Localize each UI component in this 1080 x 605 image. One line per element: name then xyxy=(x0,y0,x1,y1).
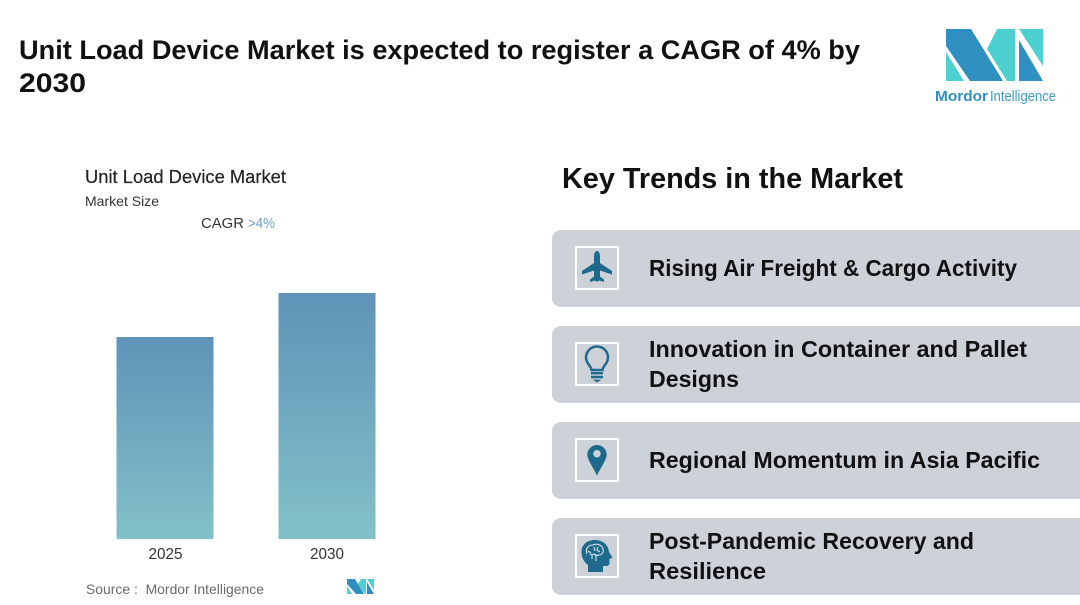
title xyxy=(19,35,860,98)
trend text xyxy=(649,336,1027,392)
axis label: 2025: 2025 xyxy=(148,546,182,563)
panel: Post-Pandemic Recovery xyxy=(552,518,1080,595)
section heading: Key Trends in the Market xyxy=(562,163,903,195)
CAGR label: CAGR xyxy=(201,215,244,232)
title: Unit Load Device Market is expected to register a CAGR of 4% by xyxy=(19,35,860,65)
trend text: Rising Air Freight & Cargo Activity xyxy=(649,255,1017,281)
panel: Regional Momentum xyxy=(552,422,1080,499)
icon: airplane xyxy=(576,247,618,289)
icon: head with brain xyxy=(576,535,618,577)
CAGR label: >4% xyxy=(248,215,275,232)
trend text: Designs xyxy=(649,366,739,392)
icon: map pin xyxy=(576,439,618,481)
chart subheading: Market Size xyxy=(85,193,159,209)
trend text: Innovation in Container and Pallet xyxy=(649,336,1027,362)
logo: Mordor Intelligence: Intelligence xyxy=(990,88,1056,105)
trend text xyxy=(649,528,974,584)
CAGR label xyxy=(201,215,275,232)
logo: Mordor Intelligence: Mordor xyxy=(935,88,988,105)
chart heading: Unit Load Device Market xyxy=(85,167,286,187)
bar: 2030 xyxy=(278,293,376,539)
trend text: Resilience xyxy=(649,558,766,584)
bar: 2025 xyxy=(116,337,214,539)
panel: Rising Air Freight xyxy=(552,230,1080,307)
trend text: Post-Pandemic Recovery and xyxy=(649,528,974,554)
source line: Source : Mordor Intelligence xyxy=(86,581,264,597)
axis label: 2030: 2030 xyxy=(310,546,344,563)
bar chart xyxy=(116,293,376,563)
icon: light bulb xyxy=(576,343,618,385)
small logo xyxy=(347,579,374,594)
title: 2030 xyxy=(19,68,86,98)
trend text: Regional Momentum in Asia Pacific xyxy=(649,447,1040,473)
panel: Innovation xyxy=(552,326,1080,403)
logo: Mordor Intelligence xyxy=(935,29,1056,105)
